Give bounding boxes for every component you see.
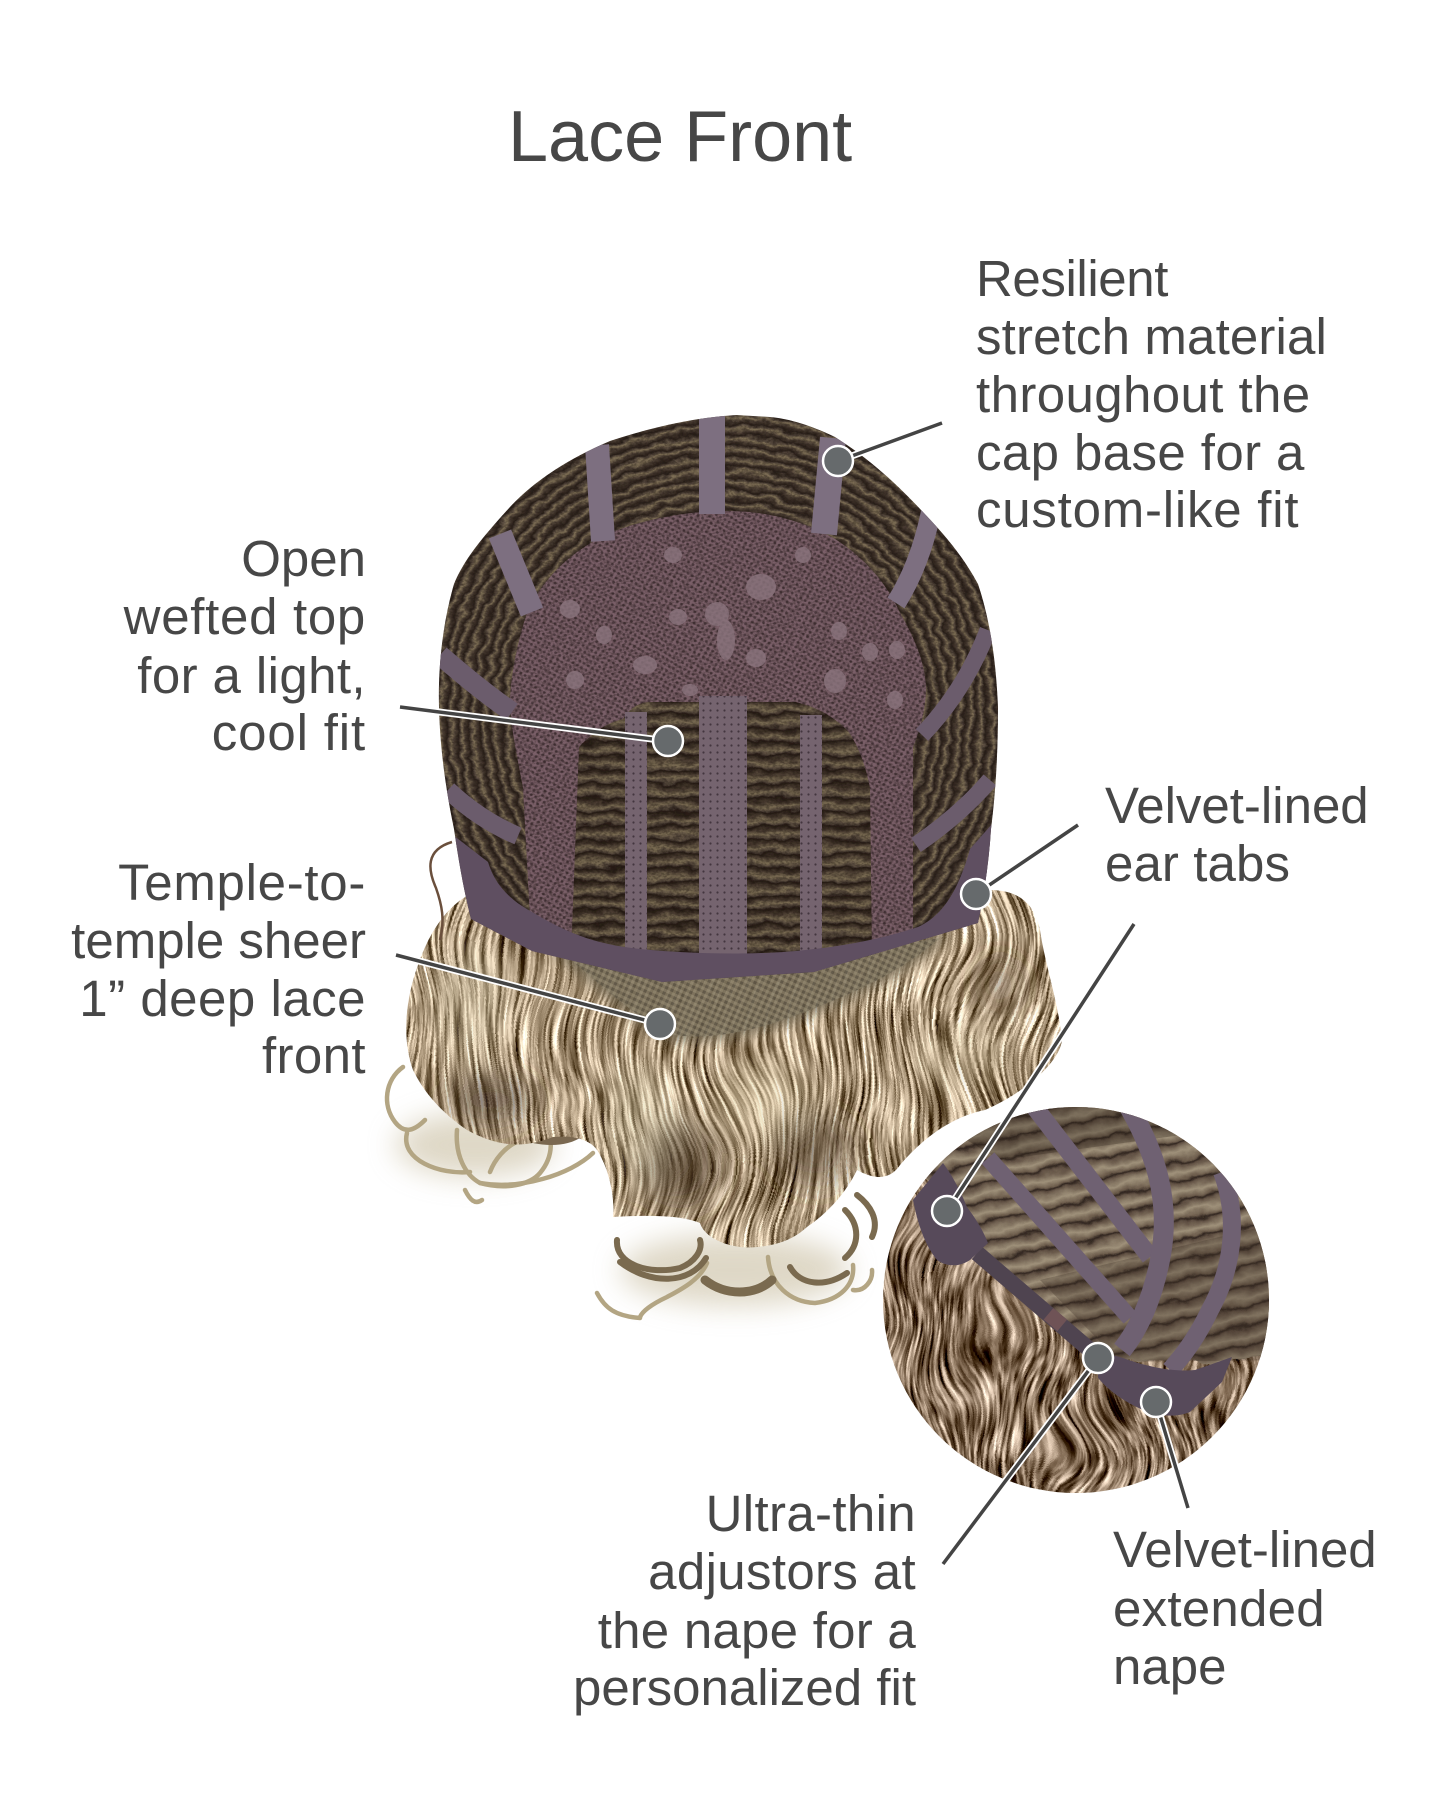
hair: stray curl by left ear tab — [430, 842, 452, 940]
pale knots on lace mesh — [560, 547, 905, 709]
label: ultra-thin adjustors: the nape for a — [598, 1602, 916, 1659]
adjuster strip — [977, 1253, 1090, 1350]
label: temple-to-temple lace: temple sheer — [71, 912, 366, 969]
lace mesh crown — [510, 511, 926, 955]
callout marker: lace front — [396, 955, 675, 1039]
hair: translucent haze behind curls — [395, 1113, 850, 1306]
label: open wefted top: for a light, — [137, 647, 366, 704]
detail inset: nape of the cap — [870, 1090, 1290, 1510]
hair: tonal shading — [435, 945, 1022, 1210]
label: velvet-lined ear tabs: ear tabs — [1105, 835, 1290, 892]
label: temple-to-temple lace: front — [262, 1027, 366, 1084]
label: resilient stretch material: stretch material — [976, 308, 1327, 365]
adjuster tab — [1044, 1308, 1067, 1331]
label: temple-to-temple lace: 1” deep lace — [79, 970, 366, 1027]
white ring around inset — [879, 1103, 1273, 1497]
hair: main mass — [406, 890, 1062, 1248]
label: resilient stretch material: cap base for a — [976, 424, 1305, 481]
callout marker: velvet ear tabs — [961, 825, 1078, 909]
label: ultra-thin adjustors: Ultra-thin — [706, 1485, 916, 1542]
hair: loose curls — [387, 1067, 875, 1318]
open weft cutout — [560, 695, 880, 960]
label: temple-to-temple lace: Temple-to- — [118, 854, 366, 911]
cap outer weft rings — [430, 405, 1010, 995]
callout marker: extended nape — [1141, 1387, 1188, 1508]
label: open wefted top: cool fit — [212, 704, 366, 761]
lace front — [545, 930, 955, 1042]
inset hair — [883, 1107, 1269, 1493]
velvet nape band — [1098, 1352, 1232, 1416]
label: open wefted top: Open — [241, 530, 366, 587]
label: resilient stretch material: throughout the — [976, 366, 1311, 423]
wig photo: main view from inside the cap — [387, 405, 1062, 1318]
leader lines and markers — [396, 423, 1188, 1564]
callout marker: open wefted top — [400, 707, 683, 756]
label: velvet-lined extended nape: extended — [1113, 1580, 1325, 1637]
fine weave speckle — [438, 415, 998, 952]
label: ultra-thin adjustors: adjustors at — [648, 1543, 916, 1600]
label: resilient stretch material: Resilient — [976, 250, 1168, 307]
label: velvet-lined ear tabs: Velvet-lined — [1105, 777, 1369, 834]
callout marker: adjustors — [943, 1343, 1113, 1564]
callout marker: stretch material — [823, 423, 942, 476]
callout marker: ear tab on inset — [932, 924, 1134, 1226]
vertical stitched straps — [625, 696, 822, 958]
label: resilient stretch material: custom-like fit — [976, 481, 1299, 538]
inset wefts — [926, 1107, 1269, 1365]
velvet band and ear tabs — [455, 824, 992, 982]
label: ultra-thin adjustors: personalized fit — [573, 1659, 916, 1716]
velvet ear tab — [913, 1163, 988, 1265]
inset straps — [988, 1100, 1232, 1370]
elastic straps — [440, 415, 990, 845]
label: velvet-lined extended nape: Velvet-lined — [1113, 1521, 1377, 1578]
label: open wefted top: wefted top — [123, 588, 366, 645]
title: Lace Front — [508, 97, 852, 177]
label: velvet-lined extended nape: nape — [1113, 1638, 1226, 1695]
